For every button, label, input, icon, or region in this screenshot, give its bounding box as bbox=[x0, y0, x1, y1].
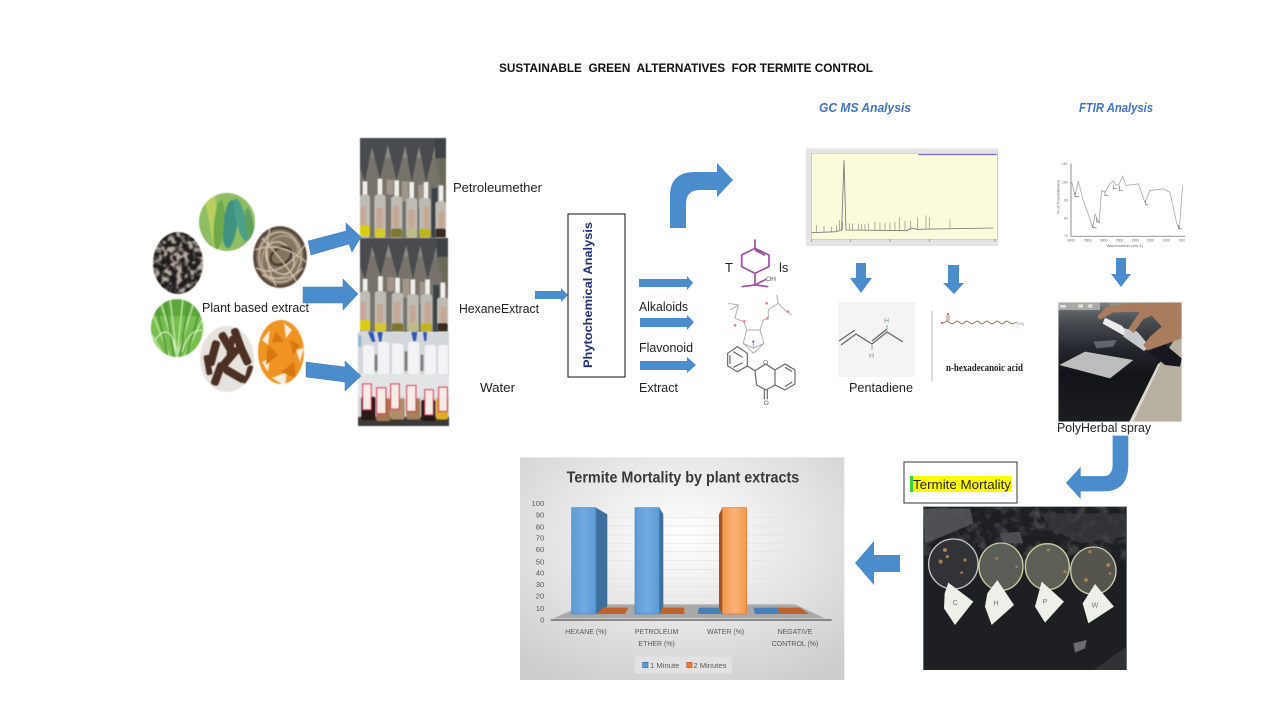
photo: dark bark bbox=[150, 230, 206, 296]
photo: root nest bbox=[252, 225, 308, 289]
arrow: flavonoid bbox=[640, 357, 696, 373]
label: alkaloids: Alkaloids bbox=[639, 300, 688, 314]
photo: eucalyptus leaves bbox=[198, 192, 257, 252]
category labels: CONTROL (%) bbox=[772, 641, 818, 648]
arrow: extracts to phytochemical analysis bbox=[535, 288, 568, 302]
plant photo cluster bbox=[150, 192, 308, 392]
chart: FTIR spectrum: 500 bbox=[1179, 238, 1185, 242]
photo: water extraction bbox=[358, 332, 449, 426]
chart: GC MS chromatogram bbox=[806, 148, 998, 246]
photo: petri dishes with termites: W bbox=[1092, 600, 1099, 609]
arrow: termite mortality to chart bbox=[855, 541, 900, 585]
arrow: GC MS to n-hexadecanoic acid bbox=[943, 265, 964, 294]
bars: petroleum ether bbox=[635, 508, 684, 614]
label: hexane extract: HexaneExtract bbox=[459, 302, 540, 316]
bars: water bbox=[698, 508, 747, 614]
chart: FTIR spectrum: Wavenumber (cm-1) bbox=[1107, 243, 1143, 248]
bars: hexane bbox=[572, 508, 628, 614]
box: termite mortality bbox=[904, 462, 1017, 503]
category labels bbox=[565, 629, 818, 648]
category labels: NEGATIVE bbox=[778, 629, 813, 636]
chart: termite mortality by plant extracts bbox=[520, 457, 844, 680]
bars: negative control bbox=[753, 608, 809, 614]
arrow: plants to water bbox=[306, 361, 361, 391]
arrow: GC MS to pentadiene bbox=[850, 263, 872, 293]
y axis labels: 70 bbox=[536, 533, 544, 542]
chart: FTIR spectrum: 1500 bbox=[1147, 238, 1154, 242]
legend: 1 Minute bbox=[650, 661, 679, 670]
y axis labels: 0 bbox=[540, 616, 544, 625]
y axis labels: 10 bbox=[536, 604, 544, 613]
molecule: flavanone bbox=[728, 347, 795, 407]
chart: FTIR spectrum: 3000 bbox=[1100, 238, 1108, 242]
label: flavonoid: Flavonoid bbox=[639, 341, 693, 355]
legend: 2 Minutes bbox=[693, 661, 727, 670]
molecule: alkaloid bbox=[728, 295, 792, 353]
chart: FTIR spectrum: 80 bbox=[1064, 216, 1068, 220]
chart: FTIR spectrum: 1000 bbox=[1163, 238, 1170, 242]
chart: FTIR spectrum bbox=[1055, 162, 1185, 248]
label: plant based extract: Plant based extract bbox=[202, 301, 310, 315]
photo: petroleum ether extraction bbox=[360, 138, 446, 238]
molecule: pentadiene bbox=[838, 302, 915, 377]
molecule: pentadiene: H bbox=[869, 353, 874, 360]
label: terpenoid fragments: ls bbox=[779, 260, 789, 275]
legend bbox=[635, 657, 732, 673]
label: polyherbal spray: PolyHerbal spray bbox=[1057, 421, 1152, 435]
photo: hexane extraction bbox=[360, 238, 448, 332]
label: water: Water bbox=[480, 381, 515, 395]
category labels: PETROLEUM bbox=[635, 629, 679, 636]
y axis labels: 60 bbox=[536, 545, 544, 554]
molecule: terpineol bbox=[742, 239, 776, 287]
y axis labels: 50 bbox=[536, 557, 544, 566]
chart: FTIR spectrum: 110 bbox=[1062, 162, 1067, 166]
chart: FTIR spectrum: % of Transmittance bbox=[1055, 179, 1060, 214]
arrow: curved up to GC MS bbox=[670, 163, 733, 228]
photo: polyherbal spray application bbox=[1058, 302, 1182, 422]
photo: orange peel bbox=[258, 320, 304, 386]
chart: FTIR spectrum: 2000 bbox=[1132, 238, 1139, 242]
photo: petri dishes with termites: H bbox=[993, 599, 999, 608]
photo: petri dishes with termites bbox=[923, 507, 1127, 670]
title: SUSTAINABLE GREEN ALTERNATIVES FOR TERMITE CONTROL bbox=[499, 61, 873, 75]
photo: petri dishes with termites: C bbox=[953, 598, 959, 607]
y axis labels: 80 bbox=[536, 522, 544, 531]
arrow: plants to petroleum ether bbox=[308, 223, 361, 255]
y axis labels bbox=[532, 499, 544, 625]
y axis labels: 100 bbox=[532, 499, 544, 508]
molecule: terpineol: OH bbox=[766, 276, 776, 283]
arrow: alkaloids bbox=[640, 315, 694, 330]
label: petroleum ether: Petroleumether bbox=[453, 181, 542, 195]
category labels: HEXANE (%) bbox=[565, 629, 607, 636]
molecule: pentadiene: H bbox=[884, 318, 889, 325]
chart: FTIR spectrum: 4000 bbox=[1068, 238, 1075, 242]
chart: FTIR spectrum: 100 bbox=[1062, 180, 1068, 184]
category labels: ETHER (%) bbox=[638, 641, 675, 648]
y axis labels: 40 bbox=[536, 568, 544, 577]
photo: cloves bbox=[200, 326, 255, 392]
box: phytochemical analysis: Phytochemical Analysis bbox=[581, 222, 595, 368]
chart title: Termite Mortality by plant extracts bbox=[567, 470, 799, 487]
y axis labels: 30 bbox=[536, 580, 544, 589]
heading: FTIR Analysis: FTIR Analysis bbox=[1079, 100, 1153, 115]
arrow: FTIR to spray bbox=[1111, 258, 1131, 287]
label: terpenoid fragments: T bbox=[725, 260, 733, 275]
arrow: plants to hexane bbox=[303, 279, 358, 310]
arrow: terpenoids bbox=[639, 276, 693, 290]
label: pentadiene: Pentadiene bbox=[849, 381, 913, 395]
chart: FTIR spectrum: 70 bbox=[1064, 234, 1068, 238]
molecule: flavanone: O bbox=[764, 400, 769, 407]
label: terpenoid fragments bbox=[725, 260, 789, 275]
y axis labels: 90 bbox=[536, 511, 544, 520]
category labels: WATER (%) bbox=[707, 629, 744, 636]
heading: GC MS Analysis: GC MS Analysis bbox=[819, 100, 911, 115]
photo: petri dishes with termites: P bbox=[1043, 597, 1048, 606]
y axis labels: 20 bbox=[536, 592, 544, 601]
chart: FTIR spectrum: 3500 bbox=[1084, 238, 1092, 242]
photo: lemongrass bbox=[150, 298, 204, 358]
arrow: curved spray to termite mortality bbox=[1066, 436, 1128, 499]
label: extract: Extract bbox=[639, 381, 679, 395]
chart gridlines and floor bbox=[551, 503, 832, 620]
chart: FTIR spectrum: 90 bbox=[1064, 198, 1068, 202]
box: phytochemical analysis bbox=[568, 214, 625, 377]
molecule: n-hexadecanoic acid bbox=[932, 311, 1025, 381]
molecule: n-hexadecanoic acid: CH₃ bbox=[1017, 321, 1025, 326]
molecule: n-hexadecanoic acid: n-hexadecanoic acid bbox=[946, 362, 1023, 374]
chart: FTIR spectrum: 2500 bbox=[1116, 238, 1124, 242]
molecule: flavanone: O bbox=[763, 359, 768, 366]
box: termite mortality: Termite Mortality bbox=[913, 477, 1012, 492]
